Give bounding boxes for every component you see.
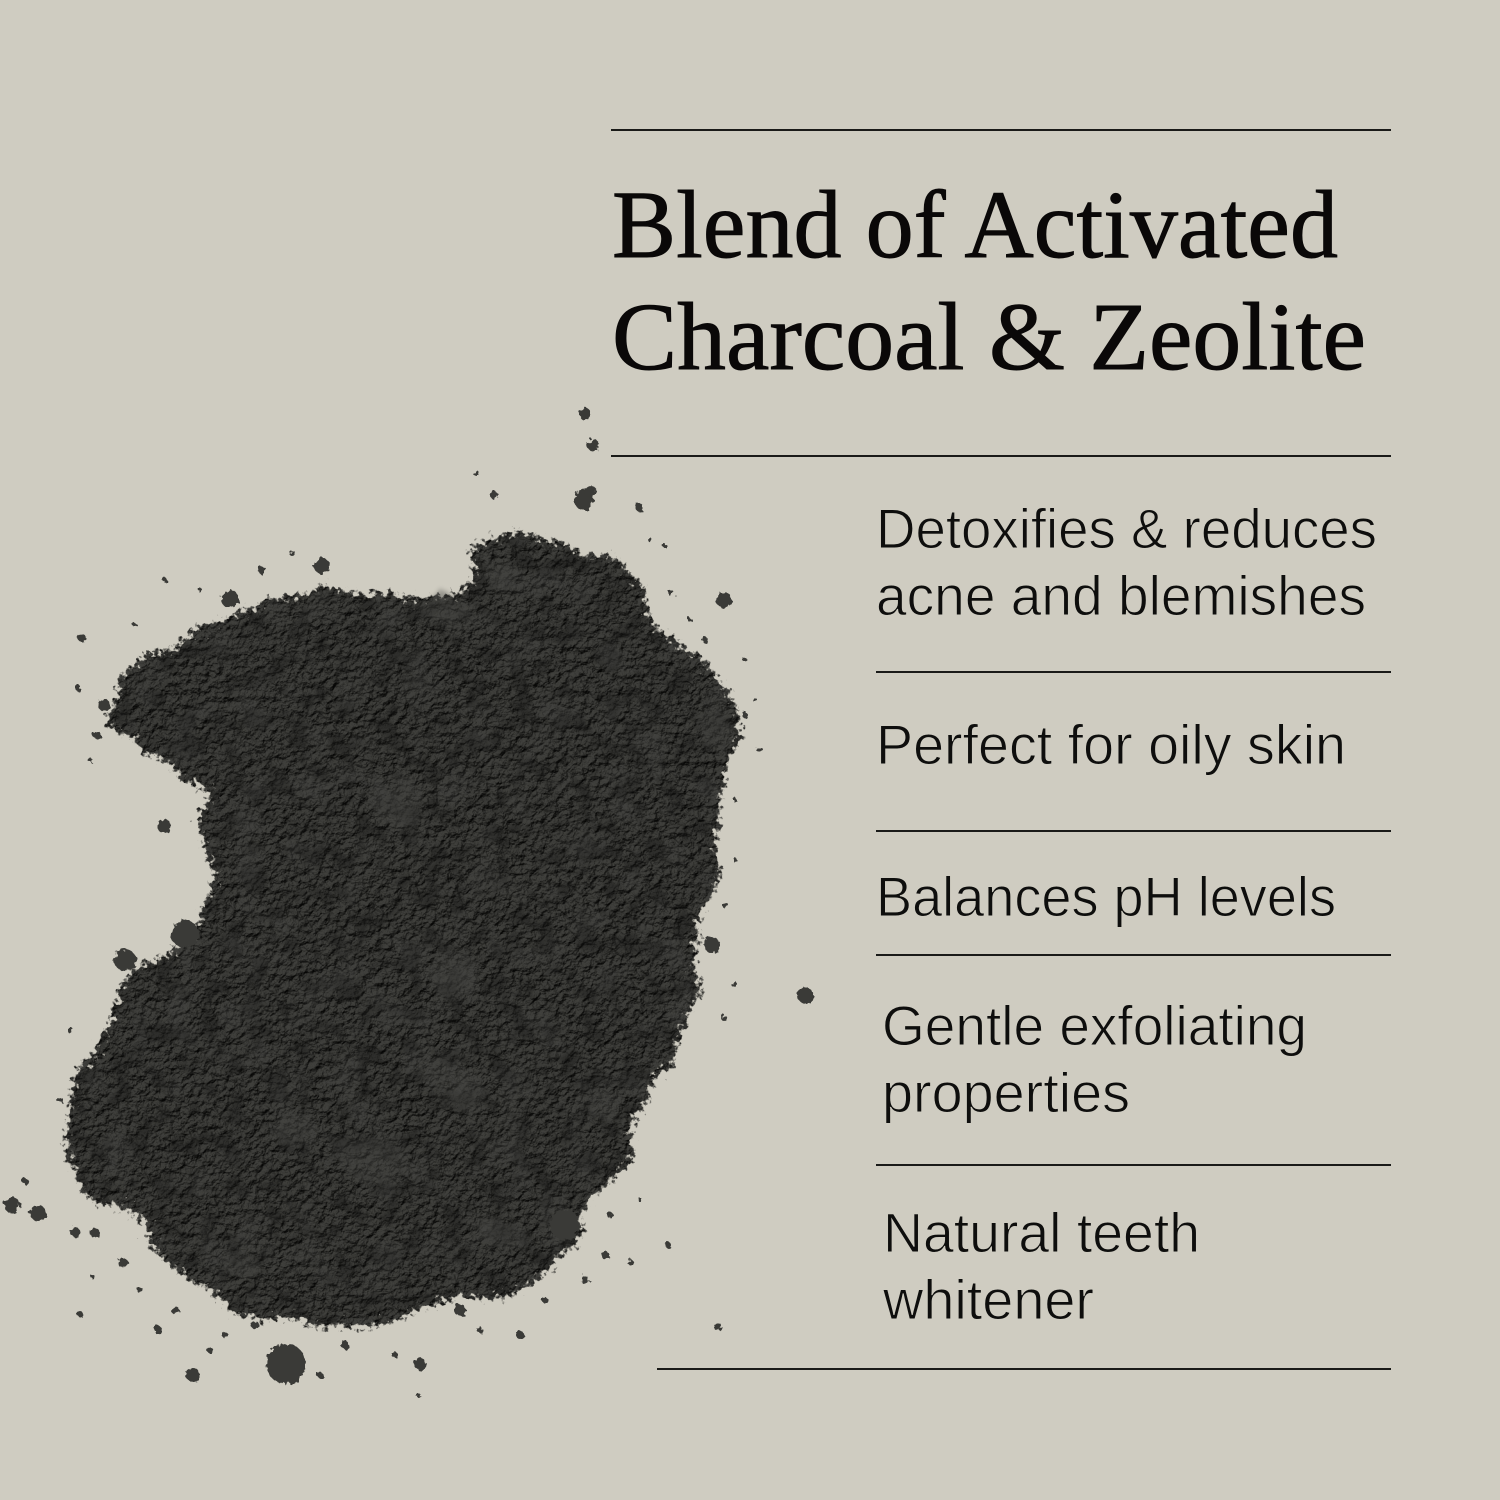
benefit: exfoliating [882, 994, 1307, 1124]
powder mass [60, 526, 746, 1333]
rule: title bottom [611, 455, 1391, 457]
rule: benefit 4 [876, 1164, 1391, 1166]
rule: benefit 2 [876, 830, 1391, 832]
benefit: teeth whitener: Natural teeth [883, 1201, 1200, 1264]
powder lumps [224, 562, 731, 1279]
title: Blend of Activated [612, 171, 1338, 278]
rule: benefit 1 [876, 671, 1391, 673]
benefit: detoxifies [876, 497, 1377, 627]
rule: title top [611, 129, 1391, 131]
rule: bottom [657, 1368, 1391, 1370]
title: Charcoal & Zeolite [612, 283, 1366, 390]
image: charcoal powder pile [0, 408, 813, 1397]
benefit: pH levels: Balances pH levels [876, 865, 1336, 928]
scattered crumbs [4, 408, 813, 1397]
benefit: teeth whitener [882, 1201, 1200, 1331]
benefit: oily skin: Perfect for oily skin [876, 713, 1346, 776]
rule: benefit 3 [876, 954, 1391, 956]
benefit: detoxifies: Detoxifies & reduces [876, 497, 1377, 560]
benefit: detoxifies: acne and blemishes [876, 564, 1366, 627]
benefit: teeth whitener: whitener [882, 1268, 1094, 1331]
benefit: exfoliating: properties [882, 1061, 1130, 1124]
benefit: exfoliating: Gentle exfoliating [882, 994, 1307, 1057]
title [612, 171, 1366, 390]
